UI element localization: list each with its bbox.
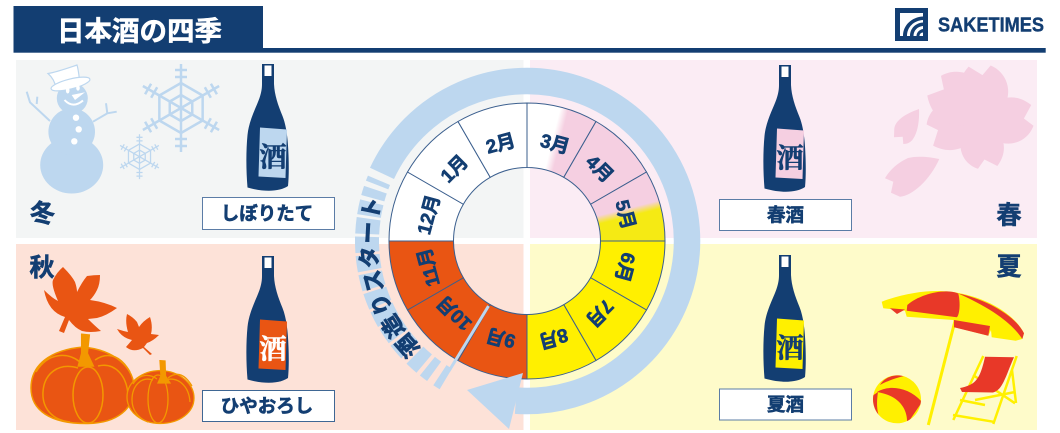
panel: winter background: [16, 60, 524, 238]
spring: falling petal lower: [885, 157, 939, 197]
spring: falling petal upper: [894, 109, 919, 144]
panel: autumn background: [16, 244, 524, 430]
arrow: yearly cycle: [382, 81, 687, 429]
segment: 4月: [564, 122, 646, 204]
summer: beach umbrella: [882, 291, 1024, 425]
arrow tail: speed streaks: [367, 180, 488, 379]
logo: SAKETIMES: SAKETIMES: [938, 14, 1044, 36]
segment: 6月: [591, 241, 665, 310]
spring: name label: 春酒: [767, 204, 804, 226]
month label: 8月: 8月: [536, 323, 570, 351]
spring: sakura flower: [919, 60, 1034, 169]
autumn: large maple leaf: [44, 267, 117, 333]
panel: spring background: [530, 60, 1037, 238]
winter: small snowflake: [115, 134, 164, 179]
winter: bottle: 酒: [260, 136, 286, 174]
month label: 10月: 10月: [433, 291, 477, 334]
segment: 3月: [527, 103, 596, 177]
autumn: bottle: 酒: [260, 328, 286, 366]
segment: 1月: [408, 122, 490, 204]
autumn: bottle: [246, 256, 289, 383]
autumn: season heading: 秋: [30, 254, 55, 282]
spring: bottle: [763, 65, 806, 192]
autumn: name label: ひやおろし: [221, 396, 313, 416]
month label: 3月: 3月: [538, 131, 572, 159]
segment: 10月: [408, 278, 490, 360]
segment: 7月: [564, 278, 646, 360]
month label: 2月: 2月: [484, 131, 518, 159]
segment: 9月: [458, 305, 527, 379]
segment: 11月: [389, 241, 463, 310]
winter: snowman icon: [27, 65, 117, 194]
month label: 12月: 12月: [414, 193, 445, 237]
segment: 12月: [389, 172, 463, 241]
segment: 8月: [527, 305, 596, 379]
winter: bottle: [246, 64, 289, 191]
summer: season heading: 夏: [996, 253, 1022, 281]
month label: 9月: 9月: [484, 323, 518, 351]
winter: season heading: 冬: [30, 200, 55, 228]
title band: [14, 6, 1046, 53]
summer: bottle: [763, 255, 806, 382]
spring: bottle: 酒: [776, 136, 804, 176]
summer: name label: 夏酒: [767, 394, 804, 415]
winter: large snowflake: [132, 64, 230, 152]
summer: beach chair: [953, 356, 1017, 424]
month label: 6月: 6月: [610, 250, 638, 284]
title band: 日本酒の四季: [57, 16, 222, 46]
autumn: large pumpkin: [31, 334, 134, 424]
winter: name label: しぼりたて: [221, 203, 313, 224]
autumn: small pumpkin: [127, 361, 194, 424]
spring: season heading: 春: [996, 202, 1022, 230]
autumn: small maple leaf: [117, 314, 159, 355]
month label: 7月: 7月: [581, 295, 617, 330]
winter: name label: [202, 198, 334, 230]
month label: 5月: 5月: [610, 198, 638, 232]
month wheel: [389, 103, 665, 379]
month label: 4月: 4月: [581, 152, 617, 187]
month label: 1月: 1月: [437, 152, 473, 187]
panel: summer background: [530, 244, 1037, 430]
segment: 2月: [458, 103, 527, 177]
logo: SAKETIMES: [895, 8, 1044, 41]
autumn: name label: [202, 390, 334, 422]
segment: 5月: [591, 172, 665, 241]
summer: name label: [720, 389, 852, 420]
curved label: sake brewing start: 酒造りスタート: [358, 200, 421, 360]
spring: name label: [720, 200, 852, 230]
summer: beach ball: [870, 375, 922, 424]
month label: 11月: 11月: [414, 245, 445, 289]
summer: bottle: 酒: [776, 326, 804, 366]
